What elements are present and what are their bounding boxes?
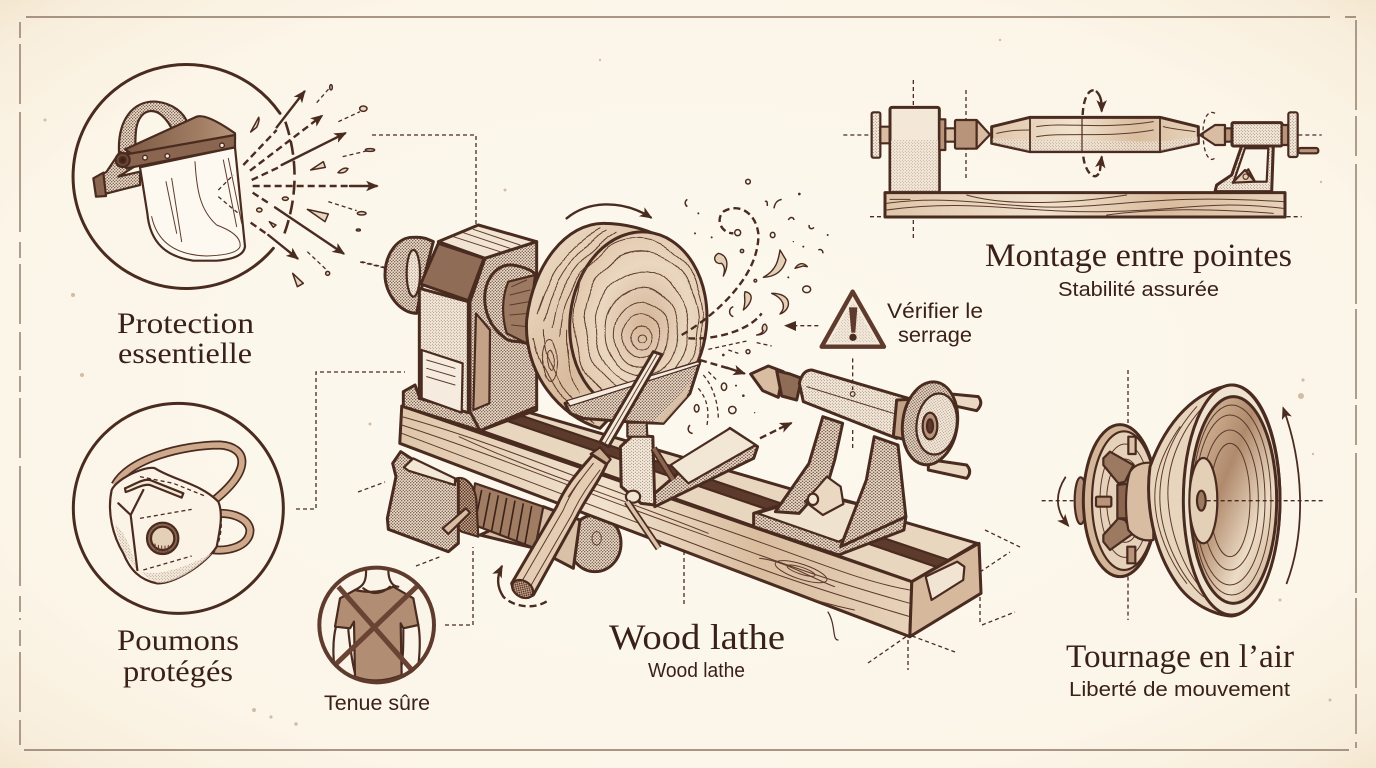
icon: wood blank side	[526, 223, 703, 428]
icon: motor	[451, 478, 580, 568]
icon: gouge blade	[600, 352, 662, 447]
panel: respirator mask	[73, 403, 283, 613]
icon: hatched panel	[421, 243, 484, 301]
wood grain on bed	[402, 417, 910, 617]
icon: tailstock	[1200, 112, 1318, 192]
heading: wood lathe: Wood lathe	[609, 617, 785, 657]
lathe motor and leg	[387, 452, 621, 572]
icon: bed slot	[507, 416, 963, 570]
icon: headstock base	[403, 385, 537, 431]
icon: crossed t-shirt	[319, 568, 434, 682]
subheading: liberté de mouvement: Liberté de mouvement	[1069, 679, 1290, 701]
icon: tool rest bowl	[565, 362, 700, 437]
icon: pulley disc	[569, 515, 621, 572]
lathe bed	[400, 406, 981, 637]
icon: workpiece	[992, 117, 1198, 152]
panel: between-centres diagram	[843, 80, 1322, 240]
shavings burst	[682, 179, 829, 438]
icon: live centre	[751, 366, 802, 400]
wood blank side grain	[533, 228, 627, 423]
arrow: warning to blank	[795, 325, 818, 327]
heading: protection essentielle	[117, 307, 254, 370]
dashed arc	[283, 122, 295, 238]
icon: warning triangle	[822, 292, 884, 347]
icon: collar	[893, 399, 910, 440]
icon: leg inner panel	[404, 458, 455, 485]
icon: gouge handle	[509, 447, 611, 602]
icon: wood blank face	[561, 225, 716, 418]
icon: bowl	[1149, 385, 1280, 616]
icon: base board	[885, 193, 1285, 217]
panel: main wood lathe	[385, 179, 981, 637]
panel: bowl turning diagram	[1042, 370, 1323, 620]
bed crack mark	[828, 612, 838, 640]
icon: barrel	[799, 370, 908, 438]
heading: poumons protégés	[117, 624, 239, 688]
heading: tournage en l'air: Tournage en l’air	[1066, 639, 1294, 675]
icon: tool-rest banjo	[620, 428, 758, 548]
leader lines	[296, 135, 1022, 670]
heading: protection essentielle: essentielle	[118, 337, 252, 370]
heading: protection essentielle: Protection	[117, 307, 254, 340]
arrowhead: warning arrow	[784, 321, 796, 331]
heading: poumons protégés: Poumons	[117, 624, 239, 657]
panel: face shield	[73, 64, 385, 288]
icon: visor and headband	[93, 102, 245, 261]
icon: handwheel	[897, 378, 963, 468]
icon: lock lever	[443, 508, 470, 534]
headstock and spindle	[385, 223, 716, 447]
shield circle	[73, 64, 280, 288]
icon: debris arrows	[243, 85, 385, 287]
icon: headstock side	[470, 242, 537, 431]
icon: bed end face	[910, 543, 981, 637]
icon: headstock	[872, 107, 990, 192]
arrow: bowl rotation	[1283, 408, 1300, 583]
icon: respirator	[110, 445, 250, 583]
icon: chuck	[1075, 425, 1157, 577]
tailstock quill and handwheel	[751, 358, 981, 478]
icon: rotation arrow under handle	[498, 567, 547, 606]
label: vérifier le serrage: Vérifier le	[887, 300, 983, 323]
heading: montage entre pointes: Montage entre pointes	[985, 238, 1292, 274]
wood blank growth rings	[573, 238, 703, 405]
centre lines	[843, 80, 1322, 240]
heading: poumons protégés: protégés	[123, 655, 233, 688]
icon: front bed face	[400, 406, 912, 637]
icon: spindle bearing	[485, 265, 537, 343]
label: vérifier le serrage: serrage	[898, 324, 972, 347]
label: vérifier le serrage	[887, 300, 983, 347]
icon: tailstock base and arch	[754, 417, 906, 555]
icon: bed top face	[479, 412, 977, 582]
subheading: stabilité assurée: Stabilité assurée	[1058, 279, 1219, 301]
centre lines	[1042, 500, 1073, 502]
icon: headstock top	[438, 225, 537, 258]
centre line through bowl	[1207, 500, 1323, 502]
panel: forbidden loose clothing	[319, 568, 434, 682]
icon: rotation arrow above blank	[567, 204, 651, 218]
icon: handle rods	[928, 393, 981, 478]
icon: rotation arrows	[1083, 90, 1216, 176]
warning callout	[784, 292, 884, 347]
icon: left leg	[387, 452, 458, 552]
icon: left handwheel	[385, 237, 433, 313]
label: tenue sûre: Tenue sûre	[324, 692, 430, 715]
icon: headstock front	[419, 288, 468, 413]
icon: T-slot notch	[926, 562, 964, 600]
mask circle	[73, 403, 283, 613]
icon: nameplate	[422, 350, 463, 413]
subheading: wood lathe: Wood lathe	[648, 660, 745, 682]
arrow: chuck rotation	[1058, 477, 1068, 525]
